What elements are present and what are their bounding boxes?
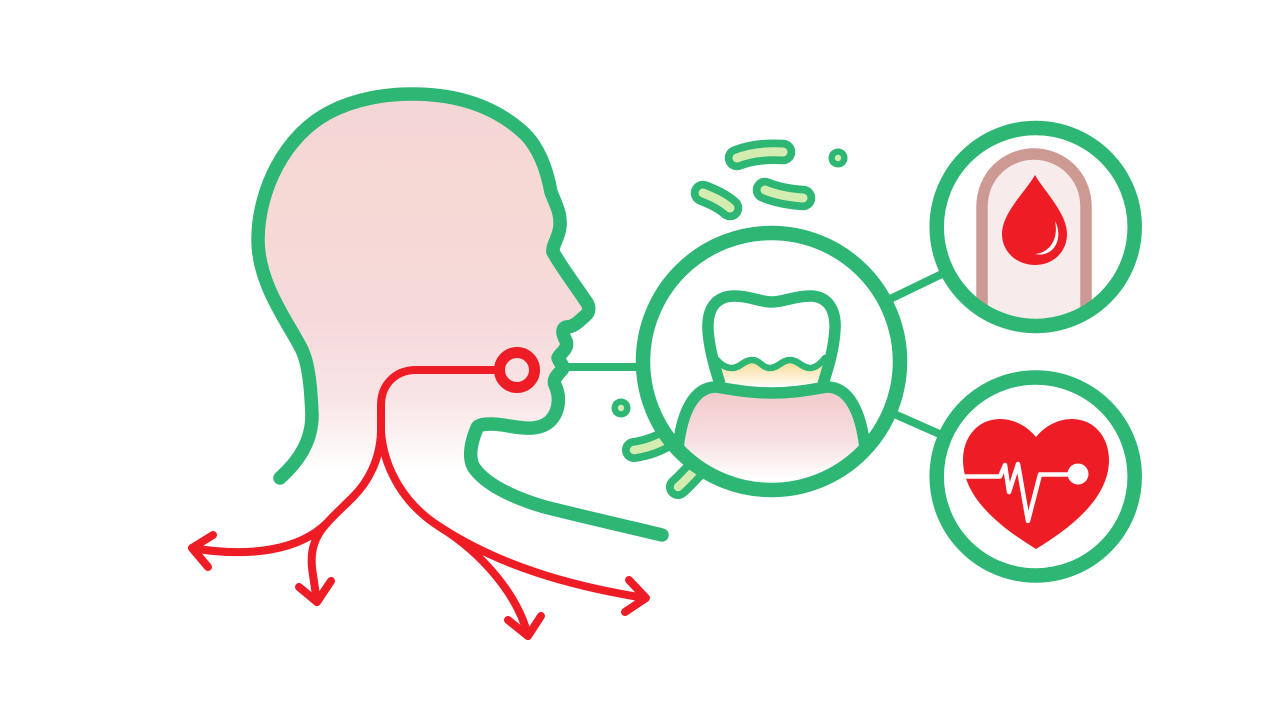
arrowhead lower left [299,581,331,602]
infographic: gum disease bacteria spreading through the body [188,87,1142,640]
plaque wave [717,358,825,368]
trunk line [381,370,498,432]
connector: mouth to tooth [563,363,640,371]
blood drop [1002,175,1067,265]
bacterium bottom, behind circle [678,462,702,487]
panel: finger with blood drop [937,128,1135,340]
heartbeat line [966,464,1070,521]
branch to lower left arrow [312,523,327,602]
branch to far right arrow [381,432,645,598]
tooth outline [708,296,835,384]
arrowhead left [192,535,213,567]
branch to left arrow [192,432,381,552]
connector: tooth to heart [892,413,944,436]
bacteria cluster [634,152,803,487]
arrowhead lower right [508,616,541,636]
circle ring [937,128,1135,326]
arrowhead far right [625,580,646,612]
circle ring [643,233,900,490]
bacterium dot left [612,398,630,418]
bacterium left [703,193,730,208]
connector: tooth to finger [888,272,946,300]
bacterium right [765,190,803,198]
heart [963,419,1109,549]
heartbeat dot [1068,464,1088,484]
branch to lower right arrow [440,527,528,636]
head outline [258,94,662,535]
panel: heart with heartbeat [937,378,1135,576]
entry point ring [500,352,534,388]
drop highlight [1035,221,1058,255]
plaque fill [721,363,823,385]
head fill [258,94,589,472]
red bloodstream spreading with arrows [192,352,646,636]
gum [674,381,869,470]
bacterium dot upper right [828,148,848,168]
panel: tooth with plaque [643,233,900,500]
finger [982,154,1086,340]
bacterium top [737,152,783,158]
bacterium lower left, behind circle [634,436,672,450]
circle background [643,233,900,490]
circle background [937,128,1135,326]
circle ring [937,378,1135,576]
